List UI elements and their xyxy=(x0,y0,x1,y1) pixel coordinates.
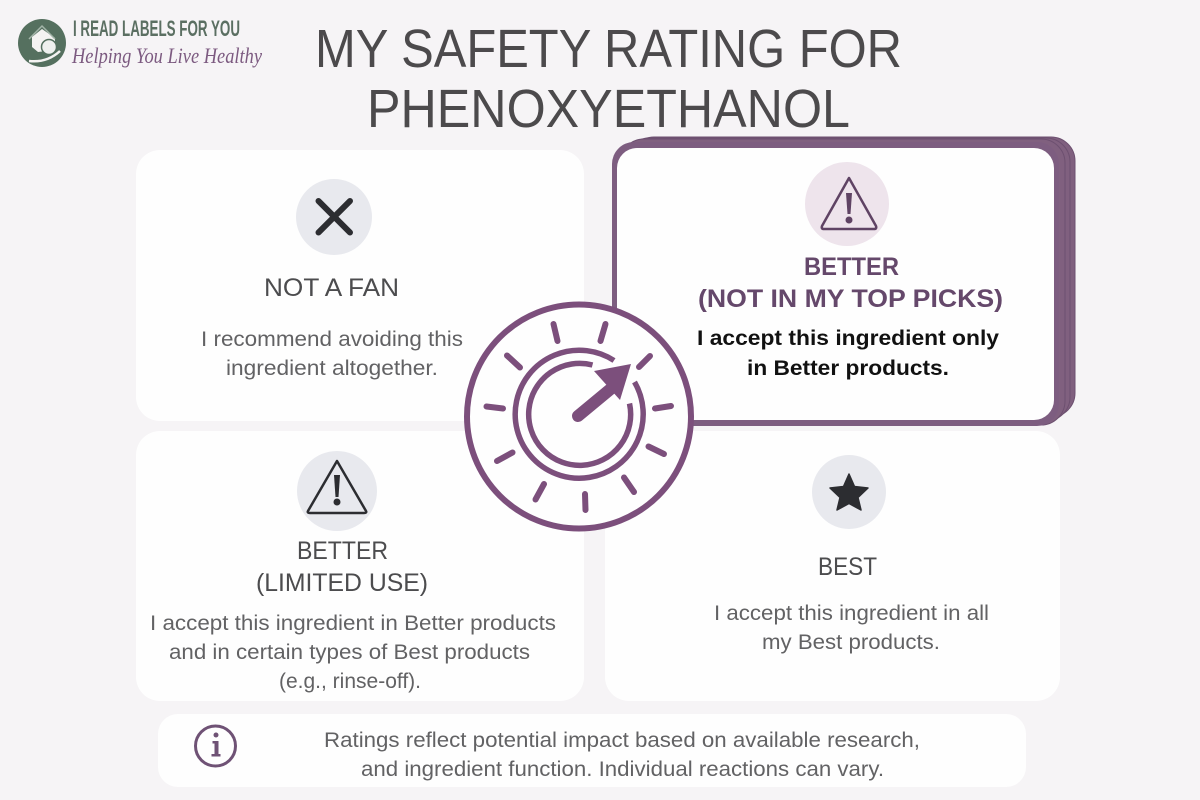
panel: disclaimer xyxy=(158,714,1026,787)
logo xyxy=(18,16,262,68)
title: MY SAFETY RATING FOR xyxy=(315,19,902,79)
text: better limited use description: and in certain types of Best products xyxy=(169,640,530,664)
text: not a fan description: I recommend avoiding this xyxy=(201,327,463,351)
heading: best: BEST xyxy=(818,553,877,581)
logo: Helping You Live Healthy xyxy=(71,43,262,68)
heading: better limited use xyxy=(256,537,428,597)
panel: best xyxy=(605,431,1060,701)
heading: better limited use: (LIMITED USE) xyxy=(256,569,428,597)
text: not a fan description xyxy=(201,327,463,380)
heading: better limited use: BETTER xyxy=(297,537,388,565)
title: PHENOXYETHANOL xyxy=(367,79,850,139)
logo: I READ LABELS FOR YOU xyxy=(73,16,240,41)
text: disclaimer xyxy=(324,728,920,781)
icon: cross xyxy=(296,179,372,255)
text: not a fan description: ingredient altogether. xyxy=(226,356,438,380)
panel: better limited use xyxy=(136,431,584,701)
text: better not in my top picks description xyxy=(697,326,999,380)
dial ticks xyxy=(486,324,671,510)
dial rings xyxy=(515,350,643,478)
text: better limited use description: I accept this ingredient in Better products xyxy=(150,611,556,635)
text: best description: my Best products. xyxy=(762,630,940,654)
text: better limited use description xyxy=(150,611,556,693)
text: better limited use description: (e.g., rinse-off). xyxy=(279,669,421,693)
heading: better not in my top picks xyxy=(698,253,1003,313)
panel: better not in my top picks (selected) xyxy=(612,137,1075,426)
heading: better not in my top picks: (NOT IN MY TOP PICKS) xyxy=(698,285,1003,313)
panel: not a fan xyxy=(136,150,584,421)
text: best description xyxy=(714,601,989,654)
icon: warning grey xyxy=(297,451,377,531)
icon: warning purple xyxy=(805,162,889,246)
text: disclaimer: Ratings reflect potential impact based on available research, xyxy=(324,728,920,752)
title xyxy=(315,19,902,139)
icon: info xyxy=(196,726,236,766)
icon: star xyxy=(812,455,886,529)
text: best description: I accept this ingredient in all xyxy=(714,601,989,625)
dial arrow xyxy=(578,364,631,416)
heading: better not in my top picks: BETTER xyxy=(804,253,899,281)
text: disclaimer: and ingredient function. Individual reactions can vary. xyxy=(361,757,884,781)
heading: not a fan: NOT A FAN xyxy=(264,274,399,302)
icon: central dial xyxy=(467,304,691,528)
text: better not in my top picks description: I accept this ingredient only xyxy=(697,326,999,350)
text: better not in my top picks description: in Better products. xyxy=(747,356,949,380)
